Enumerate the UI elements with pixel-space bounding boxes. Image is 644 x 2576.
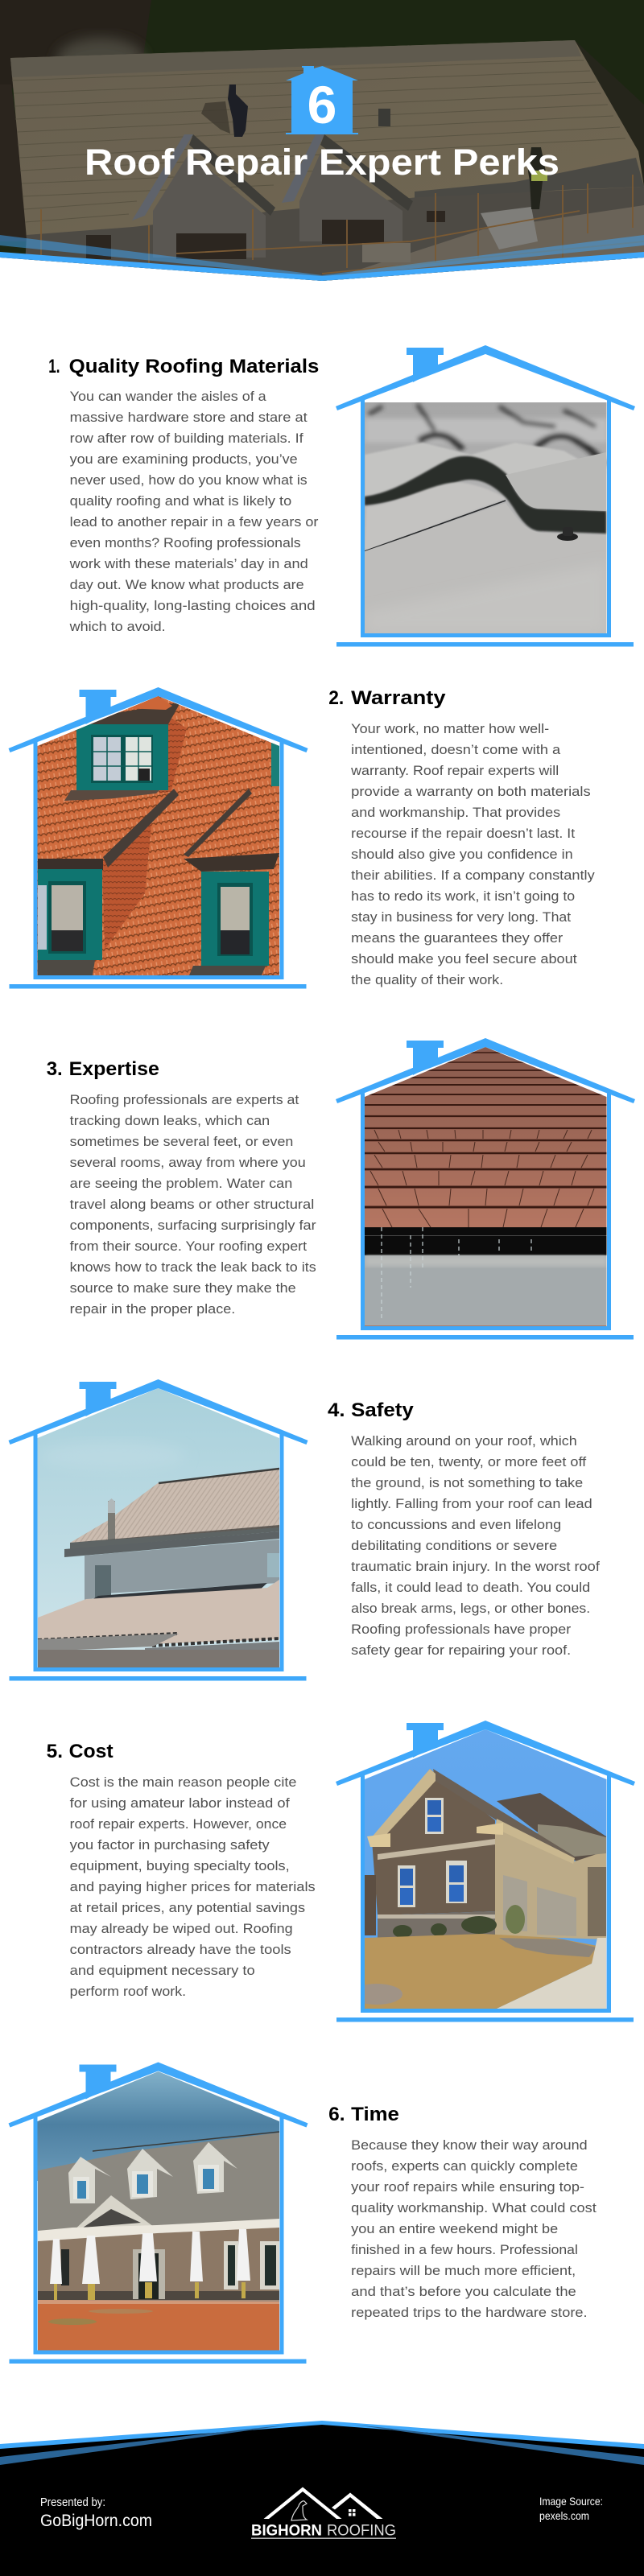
photo: grey metal roof tiles	[365, 402, 607, 633]
body text 4: also break arms, legs, or other bones.	[351, 1601, 590, 1616]
heading 6: 6.	[328, 2104, 345, 2125]
body text 4: Roofing professionals have proper	[351, 1622, 572, 1637]
body text 1: massive hardware store and stare at	[70, 410, 308, 425]
body text 1: lead to another repair in a few years or	[70, 515, 319, 530]
body text 3: Roofing professionals are experts at	[70, 1093, 299, 1107]
hero gables	[132, 134, 413, 258]
photo: wet brown roof tiles in rain	[365, 1042, 607, 1328]
body text 5: you factor in purchasing safety	[70, 1838, 270, 1853]
body text 3: knows how to track the leak back to its	[70, 1260, 316, 1275]
body text 6: roofs, experts can quickly complete	[351, 2159, 578, 2174]
footer black panel	[0, 2424, 644, 2576]
photo: brown suburban house with garage	[351, 1726, 607, 2009]
body text 2: intentioned, doesn’t come with a	[351, 743, 561, 757]
body text 1	[69, 389, 319, 634]
body text 6: repairs will be much more efficient,	[351, 2264, 576, 2278]
house frame 4	[8, 1379, 308, 1680]
body text 6	[351, 2138, 597, 2320]
icon: blue house with number 6: 6	[308, 75, 336, 134]
body text 6: and that’s before you calculate the	[351, 2285, 576, 2299]
body text 5: for using amateur labor instead of	[70, 1796, 290, 1811]
heading 6	[328, 2104, 399, 2125]
body text 6: your roof repairs while ensuring top-	[351, 2180, 584, 2195]
body text 3: several rooms, away from where you	[70, 1156, 306, 1170]
logo: Bighorn Roofing: BIGHORN	[251, 2522, 322, 2540]
heading 5: Cost	[69, 1741, 114, 1762]
heading 3: Expertise	[69, 1058, 159, 1080]
body text 5	[70, 1775, 316, 1999]
body text 2	[350, 722, 596, 987]
body text 2: warranty. Roof repair experts will	[350, 764, 559, 778]
body text 1: quality roofing and what is likely to	[70, 494, 291, 509]
body text 5: perform roof work.	[70, 1985, 186, 1999]
body text 4: to concussions and even lifelong	[351, 1518, 561, 1532]
body text 3: repair in the proper place.	[70, 1302, 235, 1317]
hero banner	[0, 0, 644, 282]
image source	[539, 2495, 603, 2522]
body text 4: traumatic brain injury. In the worst roof	[351, 1560, 600, 1574]
section 3: expertise	[47, 1038, 635, 1339]
body text 5: Cost is the main reason people cite	[70, 1775, 296, 1790]
section 6: time	[8, 2062, 597, 2364]
body text 1: row after row of building materials. If	[70, 431, 303, 446]
house frame 1	[336, 345, 635, 647]
section 4: safety	[8, 1379, 600, 1680]
body text 3	[70, 1093, 316, 1317]
footer	[0, 2421, 644, 2576]
body text 6: finished in a few hours. Professional	[351, 2243, 578, 2257]
image source: Image Source:	[539, 2495, 603, 2508]
heading 6: Time	[351, 2104, 399, 2125]
body text 4: Walking around on your roof, which	[351, 1434, 577, 1449]
body text 1: which to avoid.	[69, 620, 166, 634]
body text 3: are seeing the problem. Water can	[70, 1177, 292, 1191]
body text 2: provide a warranty on both materials	[351, 785, 591, 799]
footer blue stripe	[0, 2421, 644, 2449]
presented by: Presented by:	[40, 2496, 105, 2509]
presented by: GoBigHorn.com	[40, 2512, 152, 2530]
body text 1: You can wander the aisles of a	[70, 389, 267, 404]
heading 5: 5.	[47, 1741, 63, 1762]
icon: blue house with number 6	[286, 66, 358, 134]
photo: new house with dormers and columns	[37, 2068, 280, 2351]
body text 6: Because they know their way around	[351, 2138, 588, 2153]
body text 4: lightly. Falling from your roof can lead	[351, 1497, 592, 1511]
section 1: quality roofing materials	[48, 345, 635, 647]
hero photo: roof under construction	[0, 0, 644, 282]
body text 5: contractors already have the tools	[70, 1943, 291, 1957]
body text 3: travel along beams or other structural	[70, 1197, 314, 1212]
heading 1: Quality Roofing Materials	[69, 356, 319, 377]
logo: Bighorn Roofing: ROOFING	[327, 2522, 396, 2540]
photo: orange tile roof with teal dormers	[37, 692, 280, 976]
title: Roof Repair Expert Perks	[85, 142, 559, 183]
house frame 2	[8, 687, 308, 988]
section 5: cost	[47, 1721, 635, 2022]
heading 1: 1.	[48, 356, 60, 377]
body text 2: has to redo its work, it isn’t going to	[351, 889, 575, 904]
body text 1: day out. We know what products are	[70, 578, 304, 592]
body text 6: quality workmanship. What could cost	[351, 2201, 597, 2215]
body text 2: should also give you confidence in	[351, 847, 573, 862]
body text 5: at retail prices, any potential savings	[70, 1901, 305, 1915]
body text 1: high-quality, long-lasting choices and	[70, 599, 316, 613]
body text 3: components, surfacing surprisingly far	[70, 1218, 316, 1233]
body text 4: could be ten, twenty, or more feet off	[351, 1455, 587, 1469]
body text 2: means the guarantees they offer	[351, 931, 564, 946]
body text 3: tracking down leaks, which can	[70, 1114, 270, 1128]
body text 1: never used, how do you know what is	[70, 473, 308, 488]
body text 2: Your work, no matter how well-	[351, 722, 549, 736]
body text 1: you are examining products, you’ve	[70, 452, 298, 467]
body text 3: from their source. Your roofing expert	[70, 1239, 308, 1254]
body text 4: safety gear for repairing your roof.	[351, 1643, 571, 1658]
body text 5: equipment, buying specialty tools,	[70, 1859, 290, 1873]
heading 4	[328, 1399, 414, 1421]
body text 2: and workmanship. That provides	[351, 806, 560, 820]
heading 2: Warranty	[351, 687, 446, 709]
body text 1: even months? Roofing professionals	[70, 536, 301, 550]
presented by	[40, 2496, 152, 2530]
heading 4: 4.	[328, 1399, 345, 1421]
heading 3: 3.	[47, 1058, 63, 1080]
heading 4: Safety	[351, 1399, 414, 1421]
footer dark blue accents	[0, 2425, 644, 2465]
body text 2: their abilities. If a company constantly	[351, 868, 596, 883]
house frame 5	[336, 1721, 635, 2022]
body text 3: sometimes be several feet, or even	[70, 1135, 293, 1149]
body text 2: the quality of their work.	[351, 973, 503, 987]
body text 4: falls, it could lead to death. You could	[351, 1581, 590, 1595]
body text 3: source to make sure they make the	[70, 1281, 296, 1296]
photo: pale roofs against blue sky	[37, 1384, 280, 1668]
blue chevron stripe	[0, 252, 644, 281]
body text 4	[351, 1434, 600, 1658]
image source: pexels.com	[539, 2509, 589, 2522]
house frame 6	[8, 2062, 308, 2364]
body text 4: the ground, is not something to take	[351, 1476, 583, 1490]
body text 2: should make you feel secure about	[351, 952, 577, 967]
body text 6: you an entire weekend might be	[351, 2222, 558, 2236]
logo: Bighorn Roofing	[251, 2487, 396, 2540]
body text 4: debilitating conditions or severe	[351, 1539, 557, 1553]
translucent blue band	[0, 235, 644, 278]
body text 2: recourse if the repair doesn’t last. It	[351, 826, 576, 841]
heading 5	[47, 1741, 114, 1762]
hero workers	[201, 84, 547, 209]
body text 6: repeated trips to the hardware store.	[351, 2306, 588, 2320]
house frame 3	[336, 1038, 635, 1339]
body text 5: and paying higher prices for materials	[70, 1880, 316, 1894]
section 2: warranty	[8, 687, 596, 988]
body text 5: roof repair experts. However, once	[70, 1817, 287, 1832]
body text 5: and equipment necessary to	[70, 1964, 255, 1978]
body text 2: stay in business for very long. That	[351, 910, 572, 925]
body text 1: work with these materials’ day in and	[69, 557, 308, 571]
body text 5: may already be wiped out. Roofing	[70, 1922, 293, 1936]
heading 2: 2.	[328, 687, 344, 709]
